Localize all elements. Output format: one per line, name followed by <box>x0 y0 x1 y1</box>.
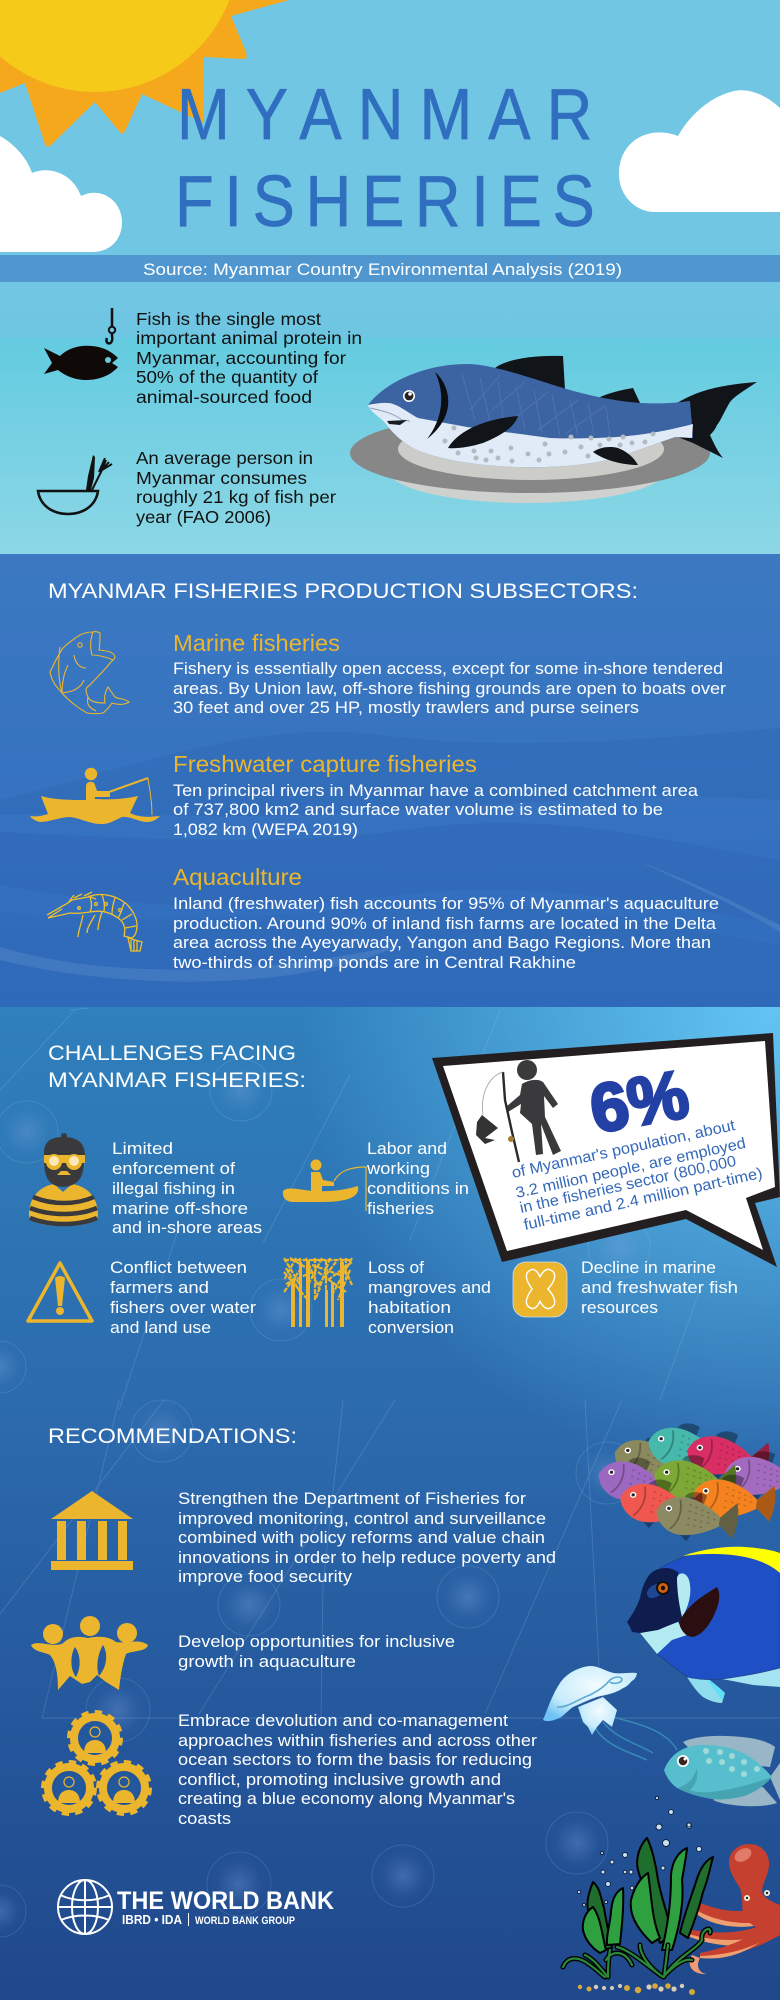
text: fish per person: An average person in <box>136 448 313 468</box>
text: freshwater capture fisheries: Ten principal rivers in Myanmar have a combined catchment area <box>173 782 699 800</box>
text: fish per person: year (FAO 2006) <box>136 507 271 527</box>
text: fish protein: animal-sourced food <box>136 387 312 407</box>
text: strengthen department <box>178 1490 556 1586</box>
text: mangroves: mangroves and <box>368 1279 491 1297</box>
heading: challenges: CHALLENGES FACING <box>48 1041 296 1065</box>
text: aquaculture: area across the Ayeyarwady, Yangon and Bago Regions. More than <box>173 934 711 952</box>
text: fish per person <box>136 448 336 527</box>
text: aquaculture: production. Around 90% of inland fish farms are located in the Delta <box>173 915 717 933</box>
text: fish protein: Fish is the single most <box>136 309 321 329</box>
panel: header with sky, sun and clouds <box>0 0 780 282</box>
text: farmers and fishers conflict: Conflict between <box>110 1259 247 1277</box>
stat: 6 percent: 6% <box>584 1056 694 1148</box>
icon: bowl with knife and fork <box>38 455 112 514</box>
text: strengthen department: innovations in order to help reduce poverty and <box>178 1549 556 1567</box>
text: resource decline: Decline in marine <box>581 1259 716 1277</box>
text: co-management <box>178 1712 538 1828</box>
text: marine fisheries: 30 feet and over 25 HP, mostly trawlers and purse seiners <box>173 699 639 717</box>
text: strengthen department: Strengthen the Department of Fisheries for <box>178 1490 527 1508</box>
icon: left cloud <box>0 136 122 252</box>
panel: ocean background with challenges and recommendations <box>0 1007 780 2000</box>
text: fish protein: important animal protein in <box>136 328 362 348</box>
text: strengthen department: improve food security <box>178 1568 353 1586</box>
text: aquaculture: Aquaculture <box>173 864 302 890</box>
illustration: octopus <box>683 1844 780 1974</box>
callout: 6 percent employed <box>432 1033 780 1267</box>
text: illegal fishing: marine off-shore <box>112 1200 248 1218</box>
icon: fisherman in a boat <box>283 1160 366 1211</box>
text: marine fisheries: Marine fisheries <box>173 630 340 656</box>
text: illegal fishing <box>112 1140 262 1237</box>
illustration: fish on a plate <box>350 356 757 503</box>
text: resource decline <box>581 1259 738 1317</box>
icon: masked poacher <box>29 1133 98 1226</box>
logo: The World Bank: THE WORLD BANK <box>117 1887 334 1915</box>
icon: institution building <box>51 1491 133 1570</box>
text: mangroves: habitation <box>368 1299 451 1317</box>
text: illegal fishing: illegal fishing in <box>112 1180 235 1198</box>
panel: production subsectors <box>0 554 780 1007</box>
icon: jumping fish outline <box>50 632 129 714</box>
icon: boat with fisherman <box>30 768 160 824</box>
text: strengthen department: combined with policy reforms and value chain <box>178 1529 545 1547</box>
text: aquaculture <box>173 864 719 972</box>
text: marine fisheries <box>173 630 727 717</box>
text: labor conditions <box>366 1140 469 1218</box>
title: MYANMAR <box>177 75 592 155</box>
icon: fish and hook <box>44 308 118 380</box>
text: labor conditions: Labor and <box>367 1140 447 1158</box>
text: fish protein: 50% of the quantity of <box>136 367 318 387</box>
text: illegal fishing: enforcement of <box>112 1160 235 1178</box>
text: co-management: conflict, promoting inclusive growth and <box>178 1771 501 1789</box>
text: inclusive growth: Develop opportunities for inclusive <box>178 1633 455 1651</box>
text: mangroves <box>368 1259 491 1337</box>
text: fish protein <box>136 309 362 407</box>
logo: The World Bank: IBRD • IDA <box>122 1913 182 1927</box>
text: freshwater capture fisheries: of 737,800 km2 and surface water volume is estimated to be <box>173 801 663 819</box>
text: fish protein: Myanmar, accounting for <box>136 348 346 368</box>
icon: shrimp <box>47 892 142 951</box>
icon: warning triangle <box>28 1263 92 1321</box>
heading: recommendations: RECOMMENDATIONS: <box>48 1424 297 1448</box>
text: farmers and fishers conflict: and land use <box>110 1319 211 1337</box>
icon: right cloud <box>619 90 780 212</box>
icon: decline cross badge <box>513 1262 567 1317</box>
illustration: seaweed and bubbles <box>563 1796 713 1995</box>
icon: three gears with people <box>46 1715 147 1811</box>
text: marine fisheries: Fishery is essentially open access, except for some in-shore tendered <box>173 660 723 678</box>
illustration: blue tang fish <box>627 1547 780 1703</box>
text: aquaculture: Inland (freshwater) fish accounts for 95% of Myanmar's aquaculture <box>173 895 719 913</box>
panel: fish consumption facts <box>0 282 780 554</box>
illustration: teal fish <box>664 1736 780 1806</box>
text: mangroves: Loss of <box>368 1259 424 1277</box>
text: freshwater capture fisheries <box>173 751 699 839</box>
text: inclusive growth <box>178 1633 455 1671</box>
text: freshwater capture fisheries: Freshwater capture fisheries <box>173 751 477 777</box>
text: resource decline: and freshwater fish <box>581 1279 738 1297</box>
text: resource decline: resources <box>581 1299 658 1317</box>
text: labor conditions: conditions in <box>367 1180 469 1198</box>
text: freshwater capture fisheries: 1,082 km (WEPA 2019) <box>173 821 358 839</box>
title: FISHERIES <box>175 162 595 242</box>
icon: person fishing <box>476 1060 561 1162</box>
heading: challenges: MYANMAR FISHERIES: <box>48 1068 306 1092</box>
illustration: jellyfish <box>543 1666 677 1760</box>
text: co-management: approaches within fisheries and across other <box>178 1732 538 1750</box>
text: illegal fishing: and in-shore areas <box>112 1219 262 1237</box>
text: employment stat: in the fisheries sector (800,000 <box>518 1153 738 1217</box>
source band <box>0 255 780 282</box>
illustration: school of coloured fish <box>593 1418 780 1547</box>
icon: mangrove trees <box>284 1258 352 1327</box>
text: farmers and fishers conflict: fishers over water <box>110 1299 257 1317</box>
text: co-management: ocean sectors to form the basis for reducing <box>178 1751 532 1769</box>
text: employment stat: 3.2 million people, are employed <box>514 1135 747 1202</box>
text: co-management: coasts <box>178 1810 231 1828</box>
heading: challenges <box>48 1041 306 1092</box>
text: labor conditions: fisheries <box>367 1200 434 1218</box>
logo: The World Bank <box>58 1880 334 1934</box>
icon: group of people <box>31 1616 148 1690</box>
icon: sun <box>0 0 289 147</box>
text: co-management: creating a blue economy along Myanmar's <box>178 1790 515 1808</box>
text: employment stat: of Myanmar's population, about <box>510 1117 737 1182</box>
text: co-management: Embrace devolution and co-management <box>178 1712 508 1730</box>
logo: The World Bank: WORLD BANK GROUP <box>195 1915 295 1927</box>
text: illegal fishing: Limited <box>112 1140 173 1158</box>
title <box>175 75 595 242</box>
text: labor conditions: working <box>366 1160 430 1178</box>
text: inclusive growth: growth in aquaculture <box>178 1653 356 1671</box>
source band: Source: Myanmar Country Environmental Analysis (2019) <box>143 260 622 279</box>
text: marine fisheries: areas. By Union law, off-shore fishing grounds are open to boats over <box>173 680 727 698</box>
text: fish per person: roughly 21 kg of fish per <box>136 487 336 507</box>
text: fish per person: Myanmar consumes <box>136 468 307 488</box>
text: farmers and fishers conflict: farmers and <box>110 1279 209 1297</box>
text: mangroves: conversion <box>368 1319 454 1337</box>
heading: subsectors: MYANMAR FISHERIES PRODUCTION SUBSECTORS: <box>48 579 638 603</box>
text: employment stat: full-time and 2.4 million part-time) <box>522 1165 764 1234</box>
text: aquaculture: two-thirds of shrimp ponds are in Central Rakhine <box>173 954 576 972</box>
text: strengthen department: improved monitoring, control and surveillance <box>178 1510 546 1528</box>
text: employment stat <box>510 1117 764 1234</box>
text: farmers and fishers conflict <box>110 1259 257 1337</box>
